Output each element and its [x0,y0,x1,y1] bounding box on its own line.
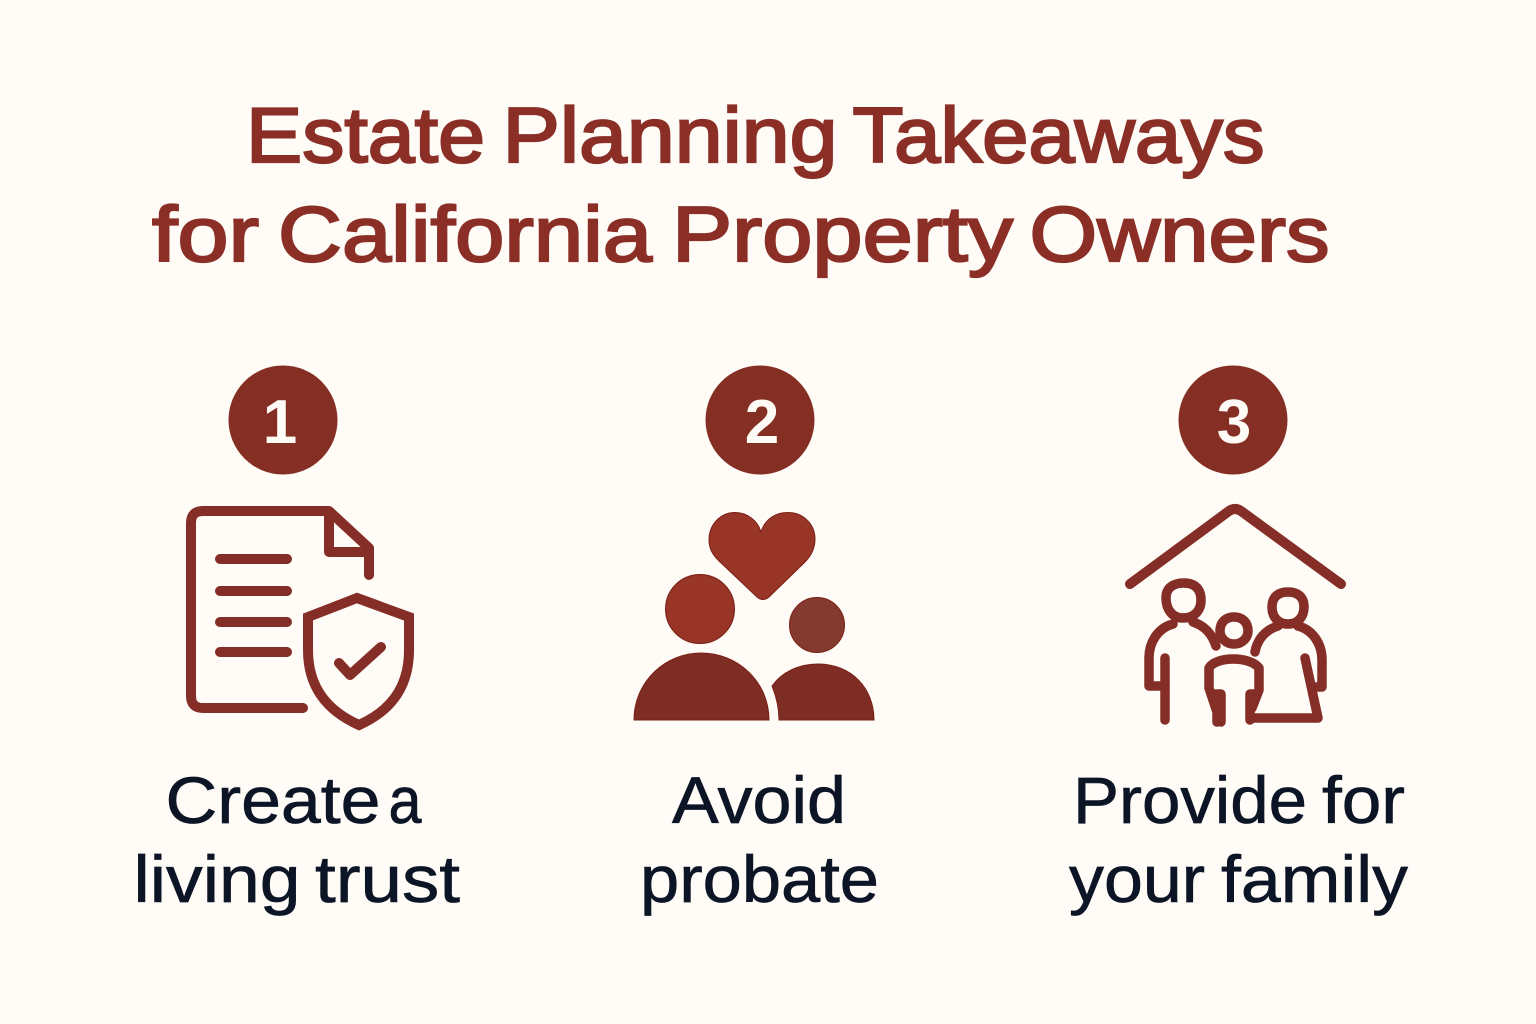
panel: avoid probate [634,366,879,916]
number badge 1: 1 [263,388,297,457]
title: Owners [1030,190,1330,278]
number badge 1 [228,366,338,474]
title: for [152,190,259,278]
icon: family under house roof [1130,509,1341,722]
icon: document with shield [191,511,409,725]
label [134,763,460,916]
label: Create [166,763,380,837]
label: trust [315,842,460,916]
title [152,91,1330,278]
number badge 3 [1178,366,1288,474]
title: Estate [246,91,485,179]
label: probate [640,842,879,916]
label: your [1069,842,1205,916]
title: California [278,190,653,278]
label [1069,763,1408,916]
icon: two people with heart [634,512,874,720]
label: Avoid [672,763,846,837]
title: Planning [502,91,838,179]
label: living [134,842,300,916]
label: a [388,763,422,837]
label [640,763,879,916]
panel: provide for your family [1069,366,1408,916]
number badge 2: 2 [745,388,779,457]
number badge 3: 3 [1217,388,1251,457]
label: for [1322,763,1405,837]
panel: create a living trust [134,366,460,916]
title: Property [672,190,1013,278]
label: Provide [1073,763,1307,837]
number badge 2 [706,366,814,474]
label: family [1221,842,1408,916]
title: Takeaways [852,91,1264,179]
